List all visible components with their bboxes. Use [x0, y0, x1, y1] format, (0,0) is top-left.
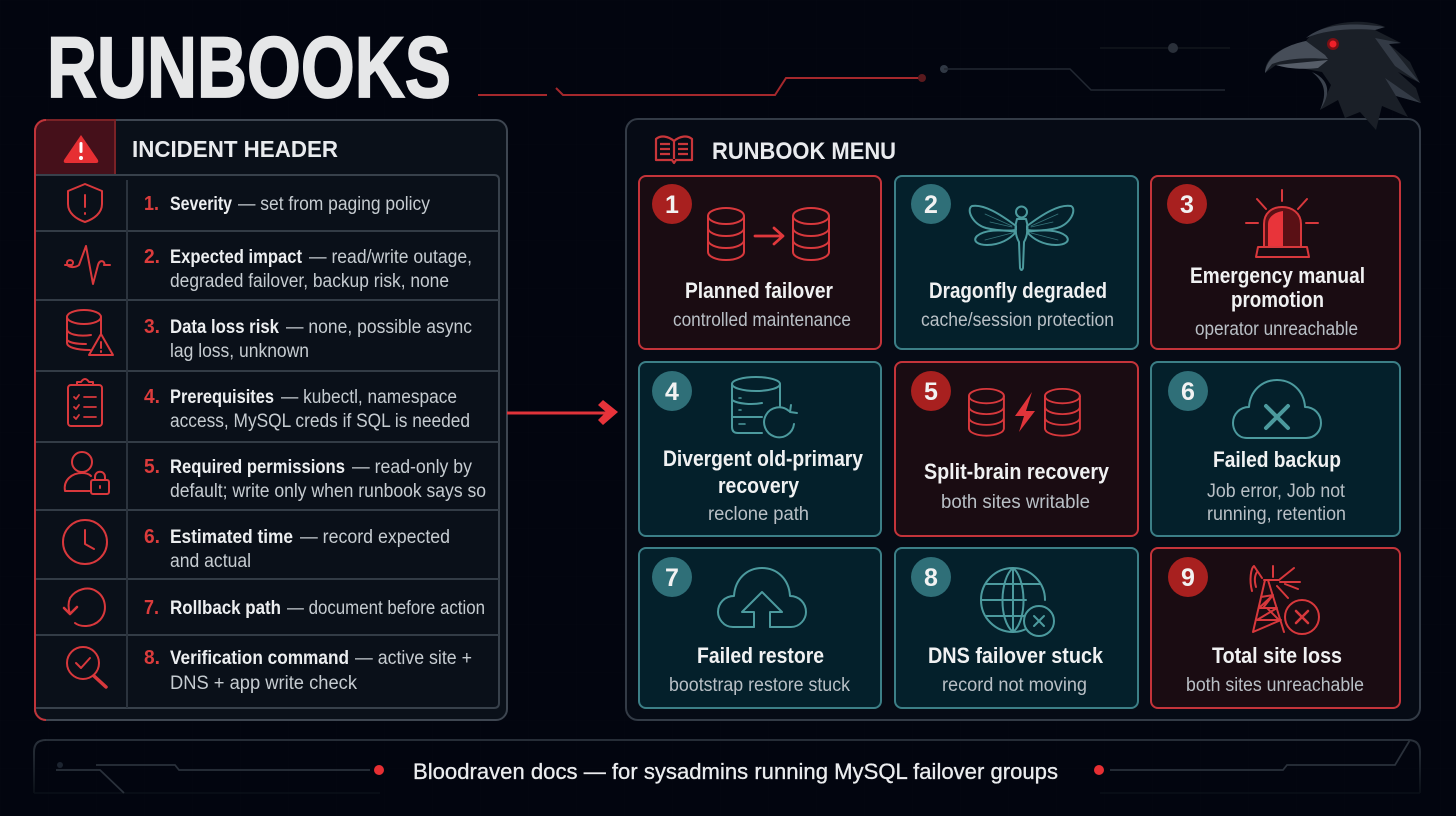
card 6: failed backup: Failed backup [1213, 447, 1341, 472]
icon: open book [656, 137, 692, 163]
card 2: dragonfly degraded: cache/session protection [921, 310, 1114, 331]
row 3: data loss risk: Data loss risk [170, 317, 279, 338]
card 8: dns failover stuck: record not moving [942, 675, 1087, 696]
row 2: expected impact: 2. [144, 246, 160, 268]
row 5: required permissions: — read-only by [352, 457, 472, 478]
row 3: data loss risk: lag loss, unknown [170, 341, 309, 362]
row 3: data loss risk: — none, possible async [286, 317, 472, 338]
icon: cloud with up arrow [718, 568, 806, 627]
card 5: split-brain recovery: Split-brain recovery [924, 459, 1110, 484]
row 7: rollback path: — document before action [287, 598, 485, 619]
icon: database warning [67, 310, 113, 355]
card 7: failed restore: 7 [665, 564, 679, 592]
decorative circuit traces [478, 43, 1230, 95]
row 4: prerequisites: Prerequisites [170, 387, 274, 408]
card 4: divergent old-primary recovery: recovery [718, 473, 800, 498]
icon: pulse [65, 246, 110, 284]
row 8: verification command: DNS + app write check [170, 673, 357, 694]
card 2: dragonfly degraded [895, 176, 1138, 349]
icon: clipboard checklist [68, 379, 102, 426]
row 8: verification command: Verification command [170, 648, 349, 669]
row 6: estimated time: — record expected [300, 527, 450, 548]
card 7: failed restore [639, 548, 881, 708]
table grid [36, 175, 499, 708]
card 9: total site loss: both sites unreachable [1186, 675, 1364, 696]
icon: globe with x [981, 568, 1054, 636]
title: RUNBOOKS [47, 20, 451, 116]
card 5: split-brain recovery: both sites writable [941, 492, 1090, 513]
icon: databases with lightning [969, 389, 1080, 436]
row 1: severity [68, 184, 430, 222]
card 4: divergent old-primary recovery: 4 [665, 378, 679, 406]
icon: server with refresh [732, 377, 797, 437]
row 4: prerequisites: — kubectl, namespace [281, 387, 457, 408]
row 2: expected impact: — read/write outage, [309, 247, 472, 268]
card 7: failed restore: Failed restore [697, 643, 824, 668]
row 6: estimated time: and actual [170, 551, 251, 572]
row 5: required permissions: 5. [144, 456, 160, 478]
icon: alert triangle [64, 135, 98, 163]
row 4: prerequisites: 4. [144, 386, 160, 408]
card 6: failed backup [1151, 362, 1400, 536]
icon: clock [63, 520, 107, 564]
icon: raven head with red eye [1265, 22, 1421, 130]
row 6: estimated time: 6. [144, 526, 160, 548]
row 2: expected impact [65, 246, 472, 292]
card 6: failed backup: 6 [1181, 378, 1195, 406]
card 3: emergency manual promotion [1151, 176, 1400, 349]
card 5: split-brain recovery [895, 362, 1138, 536]
card 1: planned failover: 1 [665, 191, 679, 219]
card 9: total site loss: 9 [1181, 564, 1195, 592]
row 6: estimated time: Estimated time [170, 527, 293, 548]
icon: rollback arrow [64, 589, 105, 626]
heading: incident header: INCIDENT HEADER [132, 136, 338, 162]
card 3: emergency manual promotion: promotion [1231, 287, 1324, 312]
card 2: dragonfly degraded: 2 [924, 191, 938, 219]
icon: user with lock [65, 452, 109, 494]
panel: runbook menu [626, 119, 1420, 720]
row 1: severity: Severity [170, 194, 232, 215]
card 8: dns failover stuck [895, 548, 1138, 708]
row 8: verification command: 8. [144, 647, 160, 669]
footer bar [34, 740, 1420, 793]
card 4: divergent old-primary recovery: Divergent old-primary [663, 446, 864, 471]
row 4: prerequisites [68, 379, 470, 432]
row 7: rollback path: 7. [144, 597, 159, 619]
row 2: expected impact: Expected impact [170, 247, 303, 268]
card 3: emergency manual promotion: operator unreachable [1195, 319, 1358, 340]
card 4: divergent old-primary recovery [639, 362, 881, 536]
icon: broken tower with x [1251, 566, 1319, 634]
row 1: severity: — set from paging policy [238, 194, 430, 215]
row 2: expected impact: degraded failover, backup risk, none [170, 271, 449, 292]
card 8: dns failover stuck: 8 [924, 564, 938, 592]
card 6: failed backup: running, retention [1207, 504, 1346, 525]
card 1: planned failover [639, 176, 881, 349]
card 6: failed backup: Job error, Job not [1207, 481, 1346, 502]
heading: runbook menu: RUNBOOK MENU [712, 138, 896, 165]
row 4: prerequisites: access, MySQL creds if SQL is needed [170, 411, 470, 432]
card 9: total site loss: Total site loss [1212, 643, 1342, 668]
icon: cloud with x [1233, 380, 1321, 438]
icon: database to database [708, 208, 829, 260]
card 8: dns failover stuck: DNS failover stuck [928, 643, 1104, 668]
arrow: header to menu [507, 400, 618, 425]
icon: siren [1246, 190, 1318, 257]
card 5: split-brain recovery: 5 [924, 378, 938, 406]
row 8: verification command [67, 647, 472, 694]
card 3: emergency manual promotion: 3 [1180, 191, 1194, 219]
footer text: Bloodraven docs — for sysadmins running MySQL failover groups [413, 759, 1058, 784]
row 7: rollback path [64, 589, 485, 626]
card 7: failed restore: bootstrap restore stuck [669, 675, 850, 696]
panel: incident header [35, 120, 507, 720]
row 5: required permissions: default; write only when runbook says so [170, 481, 486, 502]
row 8: verification command: — active site + [355, 648, 472, 669]
icon: magnifier with check [67, 647, 106, 687]
card 2: dragonfly degraded: Dragonfly degraded [929, 278, 1107, 303]
card 4: divergent old-primary recovery: reclone path [708, 504, 809, 525]
row 7: rollback path: Rollback path [170, 598, 281, 619]
row 3: data loss risk: 3. [144, 316, 160, 338]
row 6: estimated time [63, 520, 450, 572]
card 3: emergency manual promotion: Emergency manual [1190, 263, 1365, 288]
row 1: severity: 1. [144, 193, 159, 215]
card 1: planned failover: Planned failover [685, 278, 833, 303]
row 3: data loss risk [67, 310, 472, 362]
row 5: required permissions [65, 452, 486, 502]
icon: dragonfly [970, 206, 1073, 270]
row 5: required permissions: Required permissions [170, 457, 345, 478]
card 1: planned failover: controlled maintenance [673, 310, 851, 331]
card 9: total site loss [1151, 548, 1400, 708]
icon: shield [68, 184, 102, 222]
